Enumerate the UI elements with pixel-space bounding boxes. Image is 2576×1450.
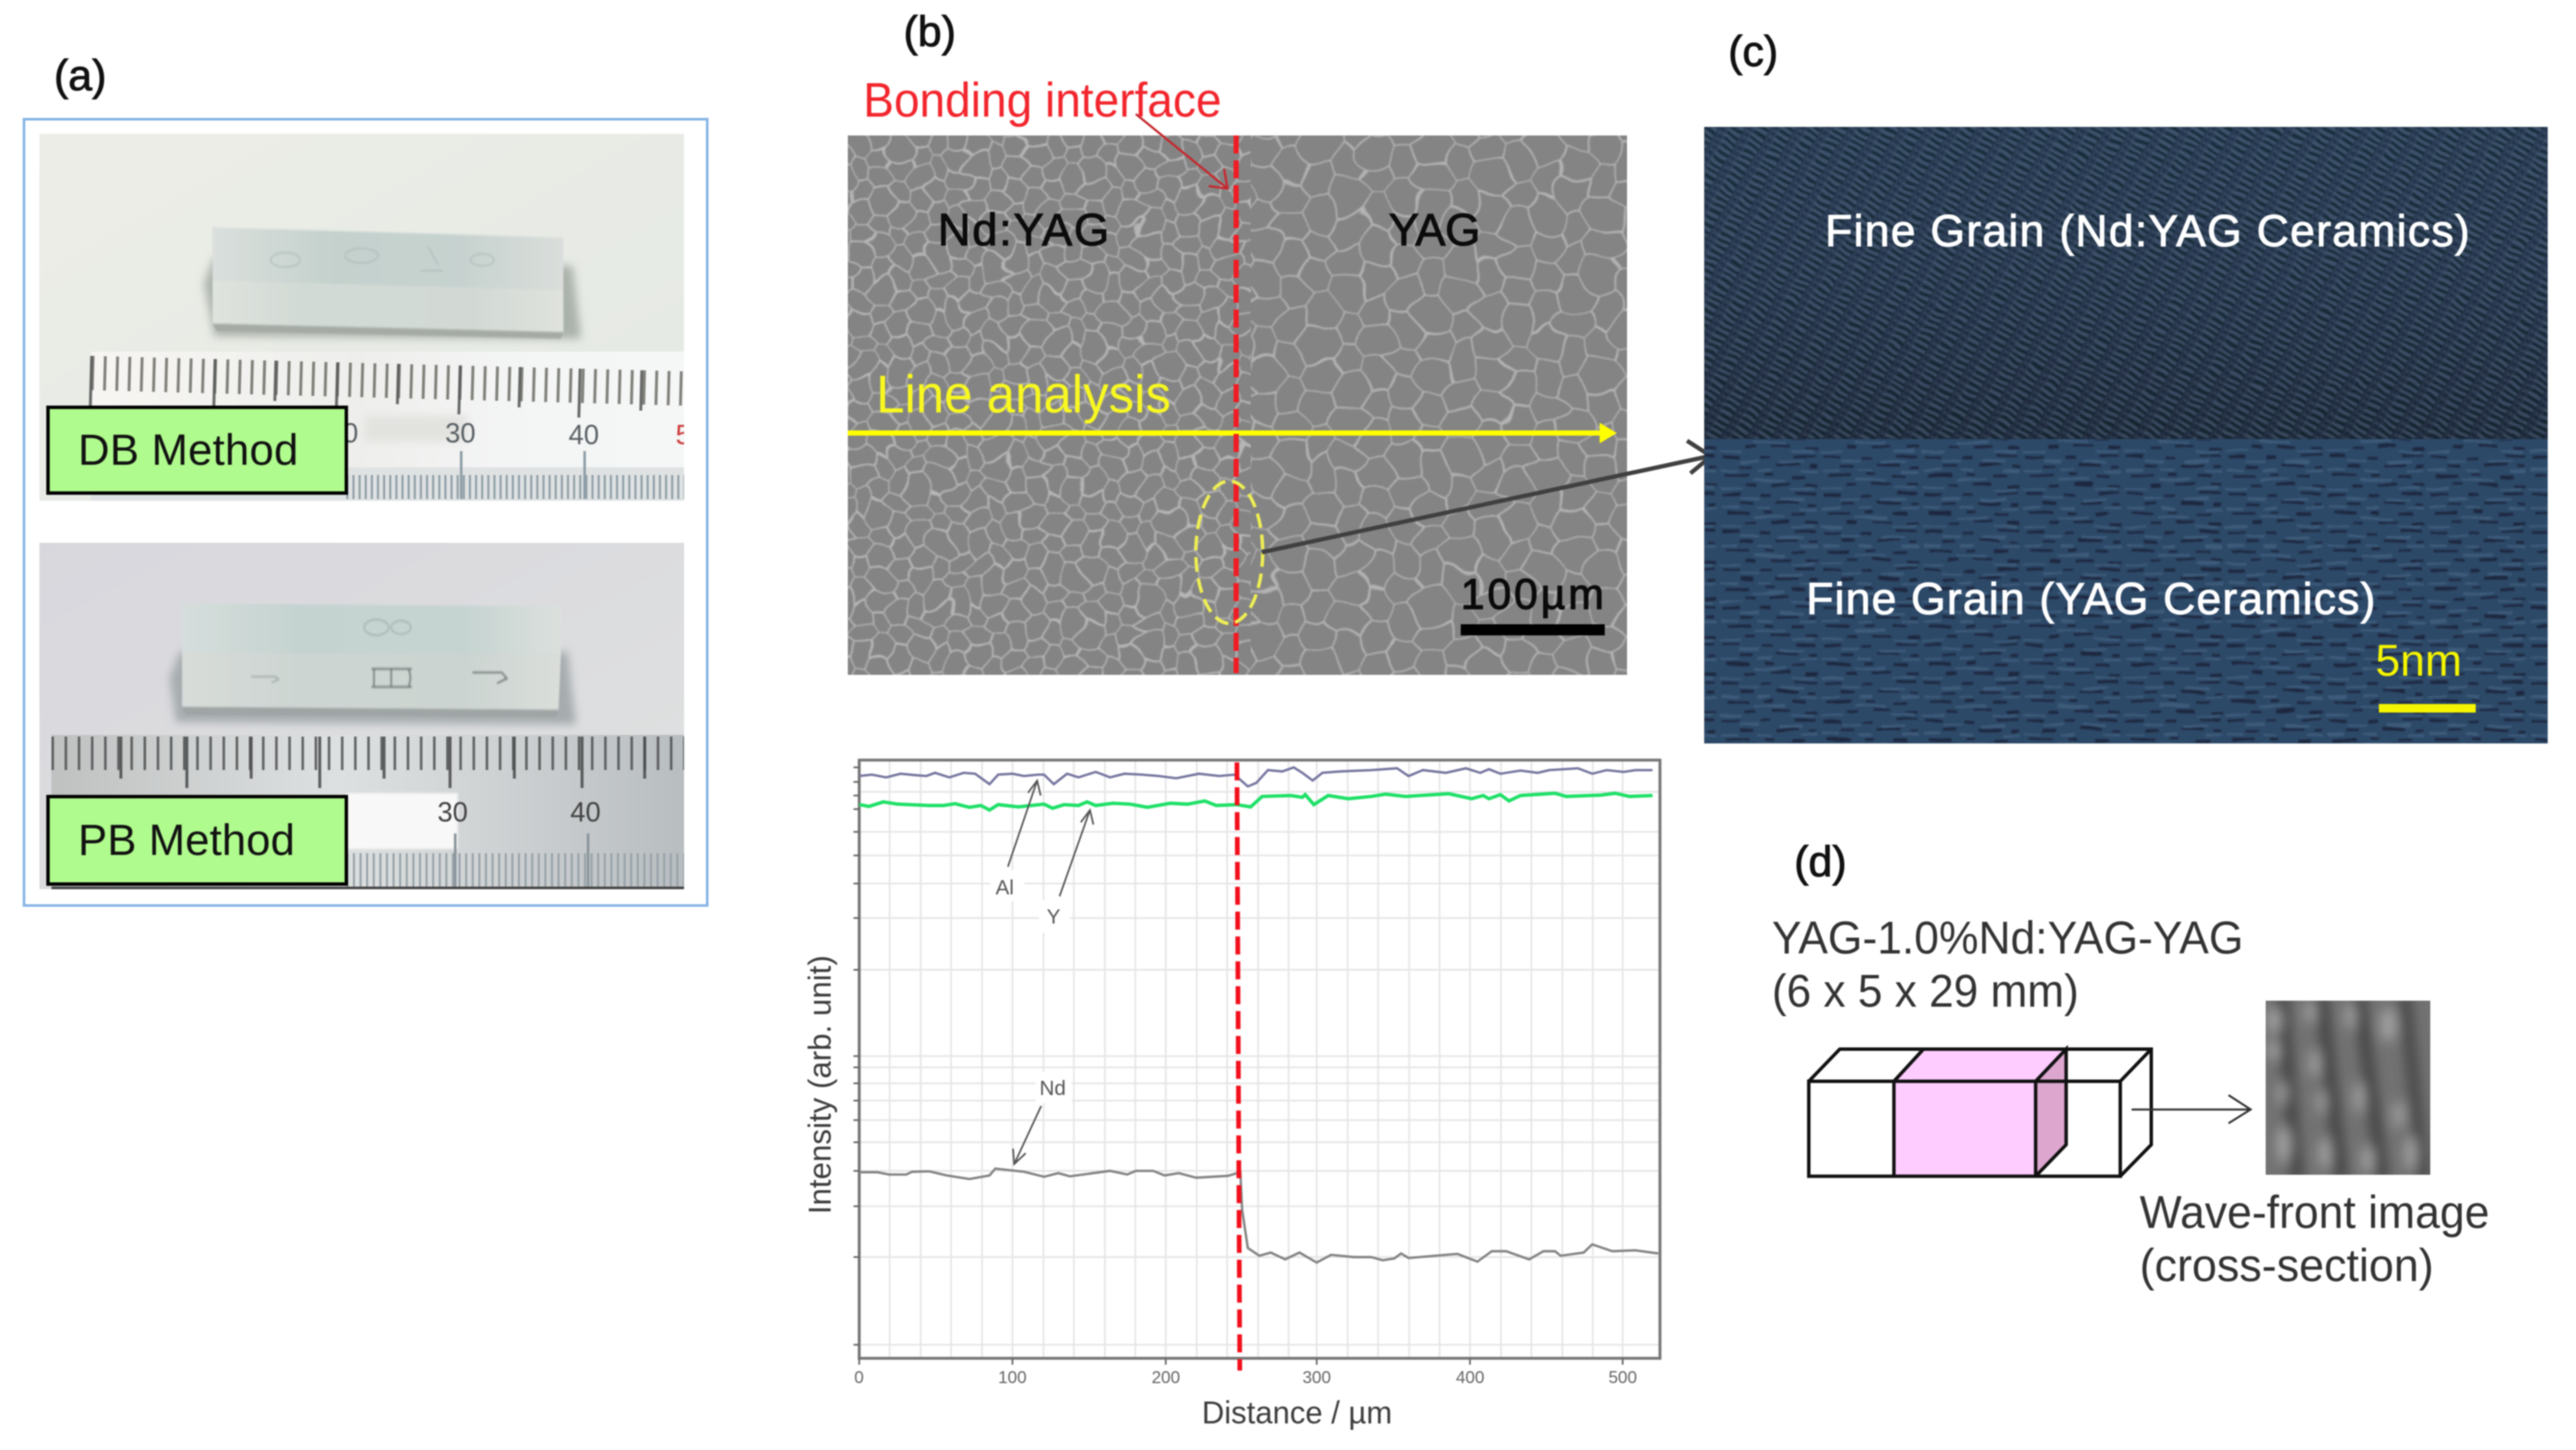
x axis tick labels: 100: [998, 1369, 1027, 1387]
dashed ellipse region: [1196, 481, 1263, 623]
ruler: 40: [568, 419, 599, 450]
diagram: composite block with arrow: [1809, 1050, 2250, 1176]
element labels: Nd: [1040, 1077, 1066, 1100]
callout arrows: [1008, 780, 1094, 1164]
label: DB Method: DB Method: [78, 425, 298, 474]
panel: (c) TEM lattice image: [1704, 127, 2548, 743]
x axis tick labels: 0: [854, 1369, 864, 1387]
label: (c): (c): [1728, 27, 1778, 75]
text: wave-front image caption: [2140, 1187, 2489, 1291]
specimen: [182, 604, 561, 717]
panel: (a) bonded specimen photographs: [24, 119, 707, 905]
label: Bonding interface: [863, 73, 1228, 189]
image: wave-front cross-section: [2266, 995, 2430, 1183]
panel: (b) SEM micrograph of bonding interface: [814, 103, 1663, 703]
ruler: 5: [676, 419, 691, 450]
label: Nd:YAG: Nd:YAG: [938, 205, 1109, 256]
label: (b): (b): [904, 8, 956, 56]
ruler: 0: [343, 418, 358, 448]
label: YAG: YAG: [1389, 205, 1480, 256]
Y curve: [859, 793, 1653, 810]
text: wave-front image caption: Wave-front image: [2140, 1187, 2489, 1238]
element labels: [990, 870, 1072, 1103]
label: Fine Grain (Nd:YAG Ceramics): Fine Grain (Nd:YAG Ceramics): [1825, 207, 2470, 256]
x axis tick labels: 200: [1151, 1369, 1180, 1387]
label: PB Method: PB Method: [78, 815, 295, 864]
micrograph background and grains: [814, 103, 1663, 703]
label: DB Method: [48, 407, 346, 493]
label: 5 nm scale bar: 5nm: [2375, 636, 2462, 686]
label: PB Method: [48, 797, 346, 884]
label: (a): (a): [54, 51, 106, 99]
label: 100 micron scale bar: 100µm: [1461, 570, 1604, 618]
arrow: [2132, 1095, 2250, 1123]
label: 5 nm scale bar: [2375, 636, 2476, 713]
text: composite description: [1772, 912, 2243, 1017]
specimen: [213, 227, 563, 339]
chart: line analysis intensity versus distance: [802, 760, 1660, 1430]
bonding interface dashed line: [1234, 135, 1239, 673]
Nd curve: [859, 1169, 1658, 1262]
label: Fine Grain (YAG Ceramics): Fine Grain (YAG Ceramics): [1806, 575, 2375, 624]
YAG lattice region: [1704, 439, 2548, 743]
text: composite description: (6 x 5 x 29 mm): [1772, 966, 2079, 1017]
element labels: Al: [995, 876, 1014, 899]
ruler: [90, 352, 691, 501]
text: wave-front image caption: (cross-section): [2140, 1240, 2434, 1291]
arrow: micrograph to TEM image: [1262, 441, 1711, 552]
x axis title: Distance / µm: [1202, 1395, 1392, 1430]
label: Bonding interface: Bonding interface: [863, 73, 1222, 128]
plot area: [854, 760, 1660, 1370]
ruler: [51, 735, 684, 889]
label: (d): (d): [1794, 838, 1846, 886]
element labels: Y: [1047, 905, 1060, 929]
ruler: 30: [445, 418, 476, 448]
Al curve: [859, 767, 1653, 786]
text: composite description: YAG-1.0%Nd:YAG-YAG: [1772, 912, 2243, 964]
label: Line analysis: Line analysis: [876, 365, 1171, 424]
photo: PB method specimen on ruler: [39, 543, 684, 889]
x axis tick labels: [854, 1369, 1637, 1387]
bonding interface dashed line: [1237, 762, 1240, 1370]
photo: DB method specimen on ruler: [39, 134, 691, 501]
ruler: 30: [437, 797, 468, 827]
line analysis arrow: [848, 423, 1617, 443]
ruler: 40: [570, 797, 601, 827]
x axis tick labels: 400: [1456, 1369, 1485, 1387]
x axis tick labels: 300: [1302, 1369, 1331, 1387]
x axis tick labels: 500: [1608, 1369, 1637, 1387]
y axis title: Intensity (arb. unit): [802, 955, 838, 1214]
panel frame: [24, 119, 707, 905]
Nd:YAG lattice region: [1704, 127, 2548, 439]
